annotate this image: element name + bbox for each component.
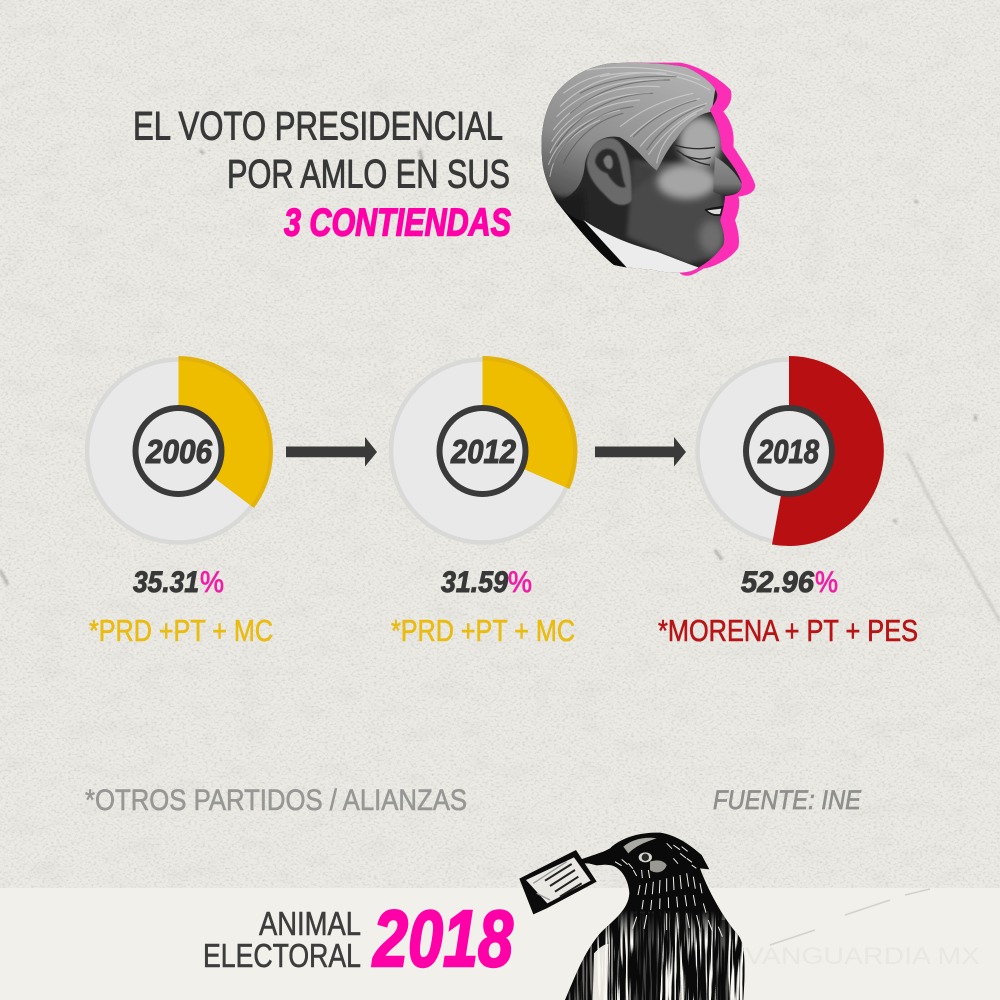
year label: 2012 (450, 433, 517, 470)
title: EL VOTO PRESIDENCIAL (133, 104, 503, 148)
chart: 2018 donut (698, 356, 884, 546)
wedge 31.59% (482, 356, 577, 489)
chart: 2012 donut (391, 356, 577, 542)
head (537, 60, 750, 280)
logo wordmark: ANIMAL (259, 905, 361, 942)
logo wordmark: 2018 (371, 894, 513, 983)
ear (587, 138, 632, 205)
dark suit (556, 200, 626, 268)
hair strands (548, 67, 710, 177)
title: 3 CONTIENDAS (284, 202, 511, 244)
party label 2012: *PRD +PT + MC (391, 613, 575, 648)
logo wordmark: ELECTORAL (203, 937, 361, 974)
year label: 2018 (757, 433, 820, 470)
face tones (627, 157, 724, 263)
logo wordmark (203, 894, 513, 983)
ballot (519, 850, 597, 914)
portrait: AMLO profile with pink offset (537, 60, 755, 280)
footnote: other parties: *OTROS PARTIDOS / ALIANZAS (85, 784, 467, 817)
value: 31.59%: 31.59 (441, 566, 508, 599)
head highlight (623, 838, 657, 853)
beak (577, 849, 613, 865)
hair (538, 60, 720, 203)
bottom band (0, 888, 1000, 1000)
wedge 52.96% (772, 356, 884, 546)
value: 52.96%: 52.96 (741, 566, 814, 599)
icon: bird holding ballot (519, 830, 750, 1000)
watermark: VANGUARDIA MX (745, 943, 980, 970)
collar (584, 220, 698, 273)
year label: 2006 (145, 433, 213, 470)
wedge 35.31% (178, 356, 273, 508)
engraved feather streaks (568, 911, 744, 1000)
arrow 2 (595, 437, 686, 466)
party label 2006: *PRD +PT + MC (89, 613, 273, 648)
mouth (704, 206, 724, 216)
value: 52.96%: % (815, 566, 838, 599)
value: 31.59%: % (508, 566, 532, 599)
title: POR AMLO EN SUS (227, 152, 510, 196)
pale chest band (593, 944, 608, 1000)
arrow 1 (286, 437, 377, 466)
pink offset silhouette (627, 63, 755, 276)
value: 35.31%: % (200, 566, 224, 599)
title (133, 104, 511, 244)
bird body (563, 830, 750, 1000)
value: 35.31%: 35.31 (133, 566, 199, 599)
eye (639, 852, 652, 862)
chart: 2006 donut (87, 356, 273, 542)
eye wrinkles (675, 145, 715, 165)
source: FUENTE: INE (713, 785, 862, 815)
party label 2018: *MORENA + PT + PES (658, 613, 918, 648)
